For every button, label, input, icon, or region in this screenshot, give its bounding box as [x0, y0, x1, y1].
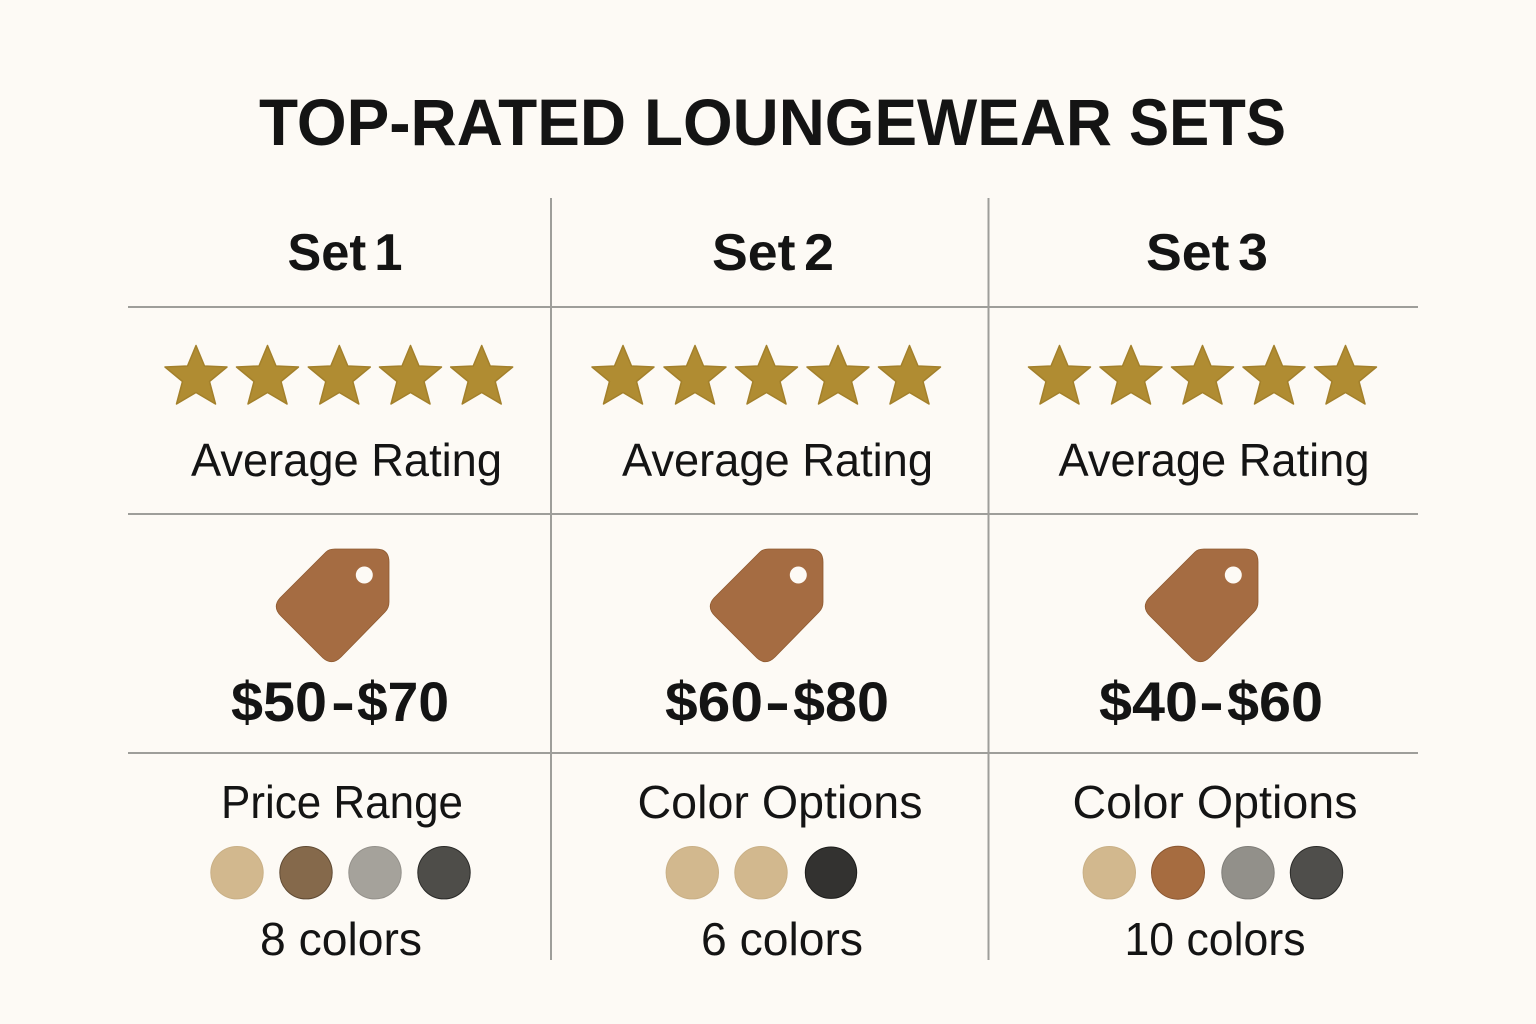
price: $60-$80: $80: [793, 670, 889, 733]
column: Set 1: [165, 224, 513, 965]
label: 8 colors: 8 colors: [260, 913, 422, 965]
colour swatches: Set 3: [1083, 846, 1343, 899]
rating stars: Set 3: [1028, 346, 1376, 404]
title: LOUNGEWEAR: [644, 85, 1112, 159]
label: price range: Price Range: [221, 776, 463, 828]
label: average rating: Average Rating: [191, 434, 502, 486]
rating stars: Set 2: [592, 346, 940, 404]
price: $60-$80: -: [765, 670, 790, 733]
heading: Set 3: Set 3: [1146, 224, 1268, 282]
icon: price tag: [276, 549, 389, 662]
label: average rating: Average Rating: [622, 434, 933, 486]
price: $40-$60: -: [1199, 670, 1224, 733]
icon: price tag: [710, 549, 823, 662]
price: $60-$80: $60: [665, 670, 763, 733]
column: Set 2: [592, 224, 940, 965]
price: $50-$70: $50: [231, 670, 327, 733]
label: 10 colors: 10 colors: [1124, 913, 1306, 965]
label: color options: Color Options: [1072, 776, 1358, 828]
colour swatches: Set 2: [666, 846, 857, 899]
price: $40-$60: $40: [1099, 670, 1198, 733]
column: Set 3: [1028, 224, 1376, 965]
title: TOP-RATED: [259, 85, 626, 159]
colour swatches: Set 1: [211, 846, 470, 899]
price: $50-$70: -: [331, 670, 355, 733]
icon: price tag: [1145, 549, 1258, 662]
price: $40-$60: $60: [1227, 670, 1323, 733]
label: 6 colors: 6 colors: [701, 913, 863, 965]
heading: Set 1: Set 1: [288, 224, 402, 282]
label: average rating: Average Rating: [1058, 434, 1370, 486]
heading: Set 2: Set 2: [712, 224, 834, 282]
price: $50-$70: $70: [357, 670, 449, 733]
label: color options: Color Options: [638, 776, 922, 828]
rating stars: Set 1: [165, 346, 513, 404]
title: SETS: [1129, 85, 1286, 159]
